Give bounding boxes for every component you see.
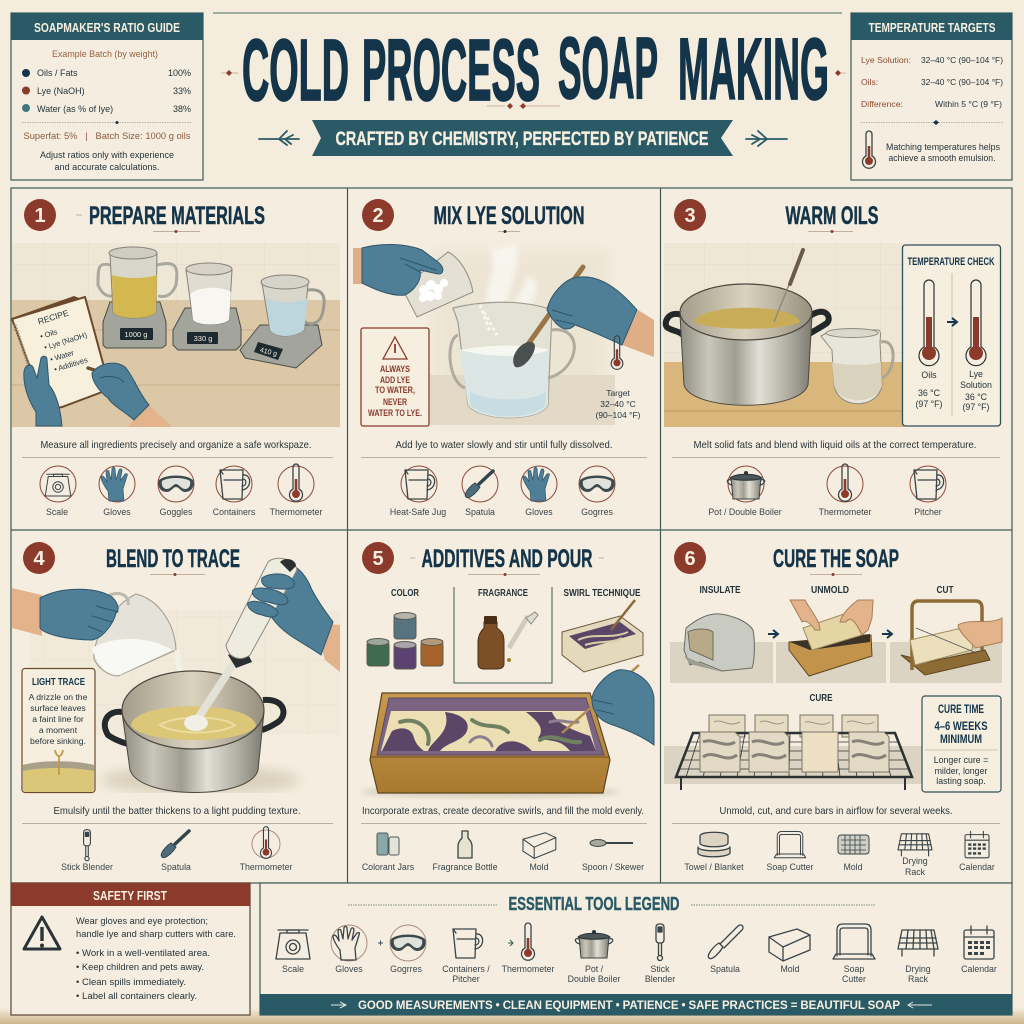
panel: safety first xyxy=(11,883,250,1015)
heading: safety first: SAFETY FIRST xyxy=(93,888,167,903)
tool: calendar: Calendar xyxy=(961,964,997,974)
temperature rows: Difference: xyxy=(861,99,903,109)
tools row xyxy=(390,466,615,517)
tool: scale xyxy=(276,930,310,974)
tool: drying rack: Drying xyxy=(905,964,931,974)
sub-heading: insulate: INSULATE xyxy=(700,584,740,596)
tool: containers / pitcher xyxy=(442,929,490,984)
ratio rows: 33% xyxy=(173,86,191,96)
tool: thermometer: Thermometer xyxy=(240,862,292,872)
tool: thermometer: Thermometer xyxy=(502,964,554,974)
callout: always add lye to water: ADD LYE xyxy=(380,375,410,385)
ratio rows: Lye (NaOH) xyxy=(37,86,85,96)
heading: mix lye solution: MIX LYE SOLUTION xyxy=(434,202,584,230)
tool: pot / double boiler: Pot / xyxy=(585,964,604,974)
caption: Add lye to water slowly and stir until fully dissolved. xyxy=(396,439,612,451)
tool: mold xyxy=(523,833,556,872)
tool: gloves: Gloves xyxy=(103,507,131,517)
tool: heat-safe jug: Heat-Safe Jug xyxy=(390,507,446,517)
subheading: example batch: Example Batch (by weight) xyxy=(52,49,158,59)
reading: lye solution: Lye xyxy=(969,369,983,379)
tool: stick blender xyxy=(61,830,113,872)
callout: cure time: lasting soap. xyxy=(936,776,986,786)
safety text xyxy=(76,916,236,1002)
main grid frame xyxy=(11,188,1012,883)
callout: always add lye to water: WATER TO LYE. xyxy=(368,408,422,418)
reading: oils xyxy=(916,370,943,409)
callout: light trace: a moment xyxy=(39,725,78,735)
tool: drying rack xyxy=(898,930,938,984)
illustration: swirl technique xyxy=(562,600,643,672)
heading: essential tool legend: ESSENTIAL TOOL LEGEND xyxy=(508,894,680,914)
tool: spatula xyxy=(161,831,191,872)
target temperature: Target xyxy=(606,388,630,398)
illustration: curing rack xyxy=(664,715,922,790)
tool: thermometer: Thermometer xyxy=(819,507,871,517)
step number 5: 5 xyxy=(372,548,384,570)
tool: gloves xyxy=(331,925,367,974)
tool: spatula: Spatula xyxy=(465,507,495,517)
illustration: unmold xyxy=(776,600,886,683)
tool: colorant jars xyxy=(362,833,415,872)
tool: mold: Mold xyxy=(529,862,549,872)
tool: stick blender: Stick xyxy=(650,964,670,974)
tool: fragrance bottle xyxy=(432,831,498,872)
panel: step 2 mix lye solution xyxy=(353,199,654,517)
tool: containers xyxy=(213,466,256,517)
target temperature: 32–40 °C xyxy=(600,399,636,409)
heading: cure the soap: CURE THE SOAP xyxy=(773,545,899,573)
heading: additives and pour: ADDITIVES AND POUR xyxy=(422,545,592,573)
icon: warning triangle xyxy=(24,917,60,949)
ratio rows xyxy=(22,68,191,114)
illustration: pot of oil xyxy=(664,243,904,427)
tool: soap cutter: Soap xyxy=(844,964,864,974)
illustration: weighing ingredients xyxy=(12,243,340,427)
tool: towel / blanket: Towel / Blanket xyxy=(684,862,744,872)
illustration: insulate xyxy=(670,614,773,683)
tools row xyxy=(40,464,322,517)
sub-heading: fragrance: FRAGRANCE xyxy=(478,587,528,599)
tool: calendar xyxy=(959,831,995,872)
tool: soap cutter xyxy=(767,832,814,872)
tool: colorant jars: Colorant Jars xyxy=(362,862,415,872)
ribbon: tagline: CRAFTED BY CHEMISTRY, PERFECTED BY PATIENCE xyxy=(336,129,708,150)
callout: always add lye to water: NEVER xyxy=(383,397,407,407)
temperature rows xyxy=(861,55,1003,109)
safety text: handle lye and sharp cutters with care. xyxy=(76,929,236,940)
title: SOAP xyxy=(558,20,658,117)
tool: goggles xyxy=(579,466,615,517)
tool: calendar: Calendar xyxy=(959,862,995,872)
safety text: • Keep children and pets away. xyxy=(76,962,204,973)
tool: scale: Scale xyxy=(282,964,304,974)
tool: goggles: Goggles xyxy=(160,507,193,517)
panel: step 3 warm oils xyxy=(664,199,1000,517)
tool: containers: Containers xyxy=(213,507,256,517)
callout: always add lye to water xyxy=(361,328,429,426)
tool: thermometer xyxy=(819,464,871,517)
tool: gloves xyxy=(99,466,135,517)
illustration: weighing ingredients: 330 g xyxy=(194,334,212,343)
illustration: swirl mold xyxy=(360,665,654,798)
tool: mold: Mold xyxy=(780,964,800,974)
illustration: weighing ingredients: • Additives xyxy=(53,355,89,374)
note: Matching temperatures helps xyxy=(886,142,1000,152)
heading: prepare materials: PREPARE MATERIALS xyxy=(89,202,265,230)
caption: Unmold, cut, and cure bars in airflow for several weeks. xyxy=(720,805,952,817)
panel: temperature targets: achieve a smooth emulsion. xyxy=(888,153,996,163)
ornament: right sprig xyxy=(746,131,787,146)
tool: calendar xyxy=(961,926,997,974)
tool: thermometer xyxy=(502,923,554,974)
arrow xyxy=(768,630,778,638)
tools row xyxy=(684,831,995,877)
tool: stick blender: Stick Blender xyxy=(61,862,113,872)
ratio rows: Water (as % of lye) xyxy=(37,104,113,114)
tool: soap cutter xyxy=(833,924,875,984)
sub-heading: unmold: UNMOLD xyxy=(811,584,849,596)
callout: light trace: surface leaves xyxy=(30,703,86,713)
arrow xyxy=(947,318,957,326)
tool: pot / double boiler xyxy=(568,930,620,984)
panel: step 5 additives and pour xyxy=(360,542,654,872)
illustration: fragrance bottle xyxy=(478,612,538,669)
tool: scale: Scale xyxy=(46,507,68,517)
tool: pitcher xyxy=(910,466,946,517)
tool: fragrance bottle: Fragrance Bottle xyxy=(432,862,498,872)
tool: containers / pitcher: Pitcher xyxy=(452,974,480,984)
thermometer: oils xyxy=(919,280,939,366)
ratio rows: 38% xyxy=(173,104,191,114)
tool: heat-safe jug xyxy=(390,466,446,517)
tool: spatula xyxy=(462,466,498,517)
panel: step 4 blend to trace xyxy=(12,542,340,872)
tool: mold xyxy=(838,835,869,872)
thermometer: lye solution xyxy=(966,280,986,366)
tool: spoon / skewer xyxy=(582,840,644,872)
reading: lye solution xyxy=(960,369,992,412)
step number 4 xyxy=(23,542,55,574)
callout: light trace xyxy=(22,668,95,792)
tool: containers / pitcher: Containers / xyxy=(442,964,490,974)
reading: lye solution: (97 °F) xyxy=(963,402,990,412)
tools row xyxy=(362,831,644,872)
illustration: weighing ingredients: 1000 g xyxy=(125,330,147,339)
callout: cure time: milder, longer xyxy=(935,766,987,776)
callout: always add lye to water: ALWAYS xyxy=(380,364,410,374)
tool: pot / double boiler: Double Boiler xyxy=(568,974,620,984)
heading: warm oils: WARM OILS xyxy=(786,202,878,230)
heading: blend to trace: BLEND TO TRACE xyxy=(106,545,240,573)
tool: gloves xyxy=(521,466,557,517)
ornament: left sprig xyxy=(259,131,299,145)
illustration: pouring lye xyxy=(353,244,654,425)
callout: light trace: a faint line for xyxy=(32,714,84,724)
tool: pot: Pot / Double Boiler xyxy=(708,507,782,517)
safety text: Wear gloves and eye protection; xyxy=(76,916,208,927)
temperature rows: 32–40 °C (90–104 °F) xyxy=(921,77,1003,87)
tool: scale xyxy=(40,466,76,517)
callout: cure time: 4–6 WEEKS xyxy=(934,719,988,733)
callout: cure time: Longer cure = xyxy=(934,755,988,765)
illustration: weighing ingredients: • Lye (NaOH) xyxy=(43,330,89,352)
callout: cure time: CURE TIME xyxy=(938,702,984,716)
panel: temperature check xyxy=(902,245,1000,426)
reading: oils: 36 °C xyxy=(918,388,941,398)
tool: drying rack: Drying xyxy=(902,856,928,866)
tool: drying rack: Rack xyxy=(905,867,926,877)
ribbon: tagline xyxy=(312,120,733,156)
tool: mold xyxy=(769,929,810,974)
panel: temperature targets xyxy=(851,13,1012,180)
illustration: blending batter xyxy=(12,558,340,799)
tool: thermometer xyxy=(270,464,322,517)
caption: Measure all ingredients precisely and organize a safe workspaze. xyxy=(40,439,312,451)
tool: thermometer xyxy=(240,827,292,872)
illustration: weighing ingredients: • Oils xyxy=(39,327,59,341)
batch info: Superfat: 5% | Batch Size: 1000 g oils xyxy=(24,131,191,141)
caption: Emulsify until the batter thickens to a light pudding texture. xyxy=(54,805,300,817)
reading: lye solution: Solution xyxy=(960,380,992,390)
divider frame: fragrance xyxy=(454,587,552,683)
footer banner xyxy=(260,994,1012,1015)
safety text: • Work in a well-ventilated area. xyxy=(76,948,210,959)
ratio rows: 100% xyxy=(168,68,191,78)
tool: towel / blanket xyxy=(684,832,744,872)
step number 6: 6 xyxy=(684,548,696,570)
target temperature: (90–104 °F) xyxy=(596,410,641,420)
step number 3: 3 xyxy=(684,205,696,227)
illustration: colorant jars xyxy=(367,612,443,669)
temperature rows: Lye Solution: xyxy=(861,55,911,65)
tool: spatula: Spatula xyxy=(161,862,191,872)
tool: thermometer: Thermometer xyxy=(270,507,322,517)
step number 4: 4 xyxy=(33,548,45,570)
sub-heading: cut: CUT xyxy=(936,584,954,596)
temperature rows: 32–40 °C (90–104 °F) xyxy=(921,55,1003,65)
illustration: cut xyxy=(890,601,1002,683)
panel: step 6 cure the soap xyxy=(664,542,1002,877)
tool: pitcher: Pitcher xyxy=(914,507,942,517)
tool: goggles xyxy=(158,466,194,517)
tool: stick blender: Blender xyxy=(645,974,675,984)
temperature rows: Oils: xyxy=(861,77,878,87)
caption: Melt solid fats and blend with liquid oils at the correct temperature. xyxy=(694,439,976,451)
sub-heading: cure: CURE xyxy=(810,692,832,704)
tool: drying rack xyxy=(898,834,932,877)
tool: soap cutter: Cutter xyxy=(842,974,866,984)
tool: goggles xyxy=(390,925,426,974)
safety text: • Clean spills immediately. xyxy=(76,977,186,988)
tool: pot xyxy=(708,466,782,517)
tool: spatula xyxy=(708,925,743,974)
reading: lye solution: 36 °C xyxy=(965,392,988,402)
tool: gloves: Gloves xyxy=(335,964,363,974)
tool: drying rack: Rack xyxy=(908,974,929,984)
reading: oils: (97 °F) xyxy=(916,399,943,409)
panel: soapmaker's ratio guide: and accurate calculations. xyxy=(54,162,160,172)
callout: light trace: A drizzle on the xyxy=(29,692,88,702)
caption: Incorporate extras, create decorative swirls, and fill the mold evenly. xyxy=(362,805,644,817)
illustration: weighing ingredients: RECIPE xyxy=(37,308,70,327)
illustration: weighing ingredients: 410 g xyxy=(259,347,278,358)
ratio rows: Oils / Fats xyxy=(37,68,78,78)
footer banner: GOOD MEASUREMENTS • CLEAN EQUIPMENT • PATIENCE • SAFE PRACTICES = BEAUTIFUL SOAP xyxy=(358,1000,900,1012)
illustration: weighing ingredients: • Water xyxy=(49,348,75,364)
step number 3 xyxy=(674,199,706,231)
callout: always add lye to water: TO WATER, xyxy=(375,385,415,395)
title xyxy=(213,13,846,119)
icon: thermometer xyxy=(862,131,876,168)
step number 1 xyxy=(24,199,56,231)
panel: soapmaker's ratio guide xyxy=(11,13,203,180)
note: Adjust ratios only with experience xyxy=(40,150,174,160)
step number 6 xyxy=(674,542,706,574)
sub-heading: color: COLOR xyxy=(391,587,419,599)
reading: oils: Oils xyxy=(921,370,937,380)
tool: goggles: Gogrres xyxy=(581,507,613,517)
tools row xyxy=(61,827,292,872)
callout: light trace: LIGHT TRACE xyxy=(32,676,85,688)
title: PROCESS xyxy=(362,22,540,119)
tool: soap cutter: Soap Cutter xyxy=(767,862,814,872)
step number 1: 1 xyxy=(34,205,46,227)
tool: spoon / skewer: Spoon / Skewer xyxy=(582,862,644,872)
temperature rows: Within 5 °C (9 °F) xyxy=(935,99,1002,109)
callout: cure time: MINIMUM xyxy=(940,732,982,746)
tools row xyxy=(708,464,946,517)
tool: goggles: Gogrres xyxy=(390,964,422,974)
sub-heading: swirl technique: SWIRL TECHNIQUE xyxy=(564,587,640,599)
tool: gloves: Gloves xyxy=(525,507,553,517)
arrow xyxy=(882,630,892,638)
text: MAKING xyxy=(678,21,829,118)
panel: essential tool legend xyxy=(260,883,1012,1015)
callout: light trace: before sinking. xyxy=(30,736,86,746)
step number 2: 2 xyxy=(372,205,384,227)
panel: step 1 prepare materials xyxy=(12,199,340,517)
heading: ratio guide: SOAPMAKER'S RATIO GUIDE xyxy=(34,20,180,35)
step number 2 xyxy=(362,199,394,231)
step number 5 xyxy=(362,542,394,574)
callout: cure time xyxy=(922,696,1001,792)
tool: stick blender xyxy=(645,924,675,984)
safety text: • Label all containers clearly. xyxy=(76,991,197,1002)
target temperature xyxy=(596,336,641,420)
tool: mold: Mold xyxy=(843,862,863,872)
title: COLD xyxy=(242,22,349,119)
tool: spatula: Spatula xyxy=(710,964,740,974)
